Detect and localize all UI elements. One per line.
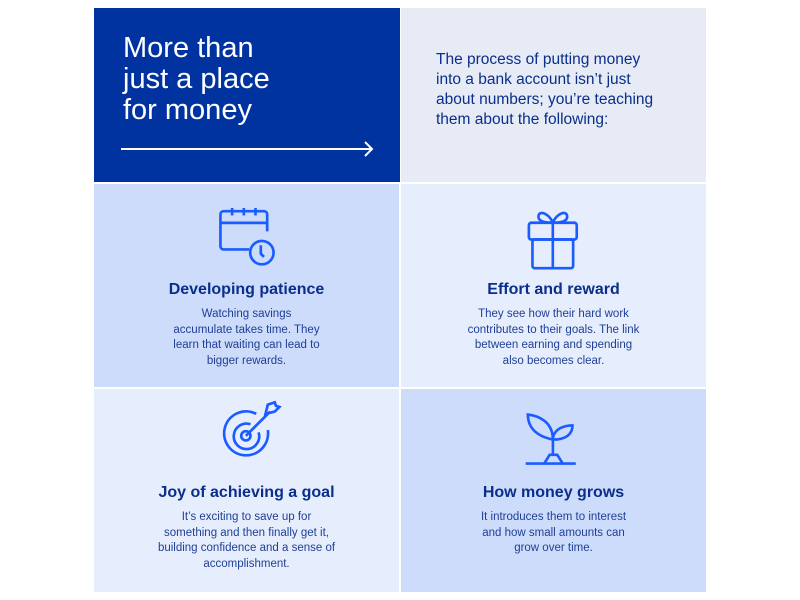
text: and how small amounts can <box>482 526 625 538</box>
intro text: about numbers; you’re teaching <box>436 91 653 108</box>
heading: Effort and reward <box>487 281 620 298</box>
heading: How money grows <box>483 484 624 501</box>
intro text: into a bank account isn’t just <box>436 71 631 88</box>
arrow <box>121 141 374 157</box>
text: learn that waiting can lead to <box>173 339 320 351</box>
icon: gift <box>528 212 578 270</box>
intro text: them about the following: <box>436 111 608 128</box>
icon: calendar clock <box>219 208 275 266</box>
text: bigger rewards. <box>207 354 286 366</box>
title: More than <box>123 32 254 64</box>
text <box>158 511 336 570</box>
title <box>122 32 270 126</box>
text: Watching savings <box>202 308 291 320</box>
text: It’s exciting to save up for <box>182 511 311 523</box>
text: building confidence and a sense of <box>158 542 335 554</box>
text: contributes to their goals. The link <box>468 324 639 336</box>
title: just a place <box>123 63 270 95</box>
text: something and then finally get it, <box>164 526 329 538</box>
text: between earning and spending <box>475 339 632 351</box>
text: accumulate takes time. They <box>173 324 320 336</box>
heading: Joy of achieving a goal <box>158 484 335 501</box>
intro text <box>436 51 653 128</box>
intro text: The process of putting money <box>436 51 640 68</box>
text: They see how their hard work <box>478 308 629 320</box>
text: grow over time. <box>514 542 593 554</box>
panel: grows <box>401 389 706 592</box>
text: also becomes clear. <box>503 354 604 366</box>
panel: title <box>94 8 400 182</box>
text: It introduces them to interest <box>481 511 626 523</box>
heading: Developing patience <box>169 281 324 298</box>
text <box>481 511 626 554</box>
text: accomplishment. <box>203 558 290 570</box>
icon: sprout <box>526 413 576 465</box>
text <box>468 308 640 366</box>
panel: goal <box>94 389 399 592</box>
panel: effort <box>401 184 706 387</box>
title: for money <box>123 94 252 126</box>
panel: intro <box>401 8 706 182</box>
text <box>173 308 320 366</box>
panel: patience <box>94 184 399 387</box>
icon: target <box>222 400 282 457</box>
